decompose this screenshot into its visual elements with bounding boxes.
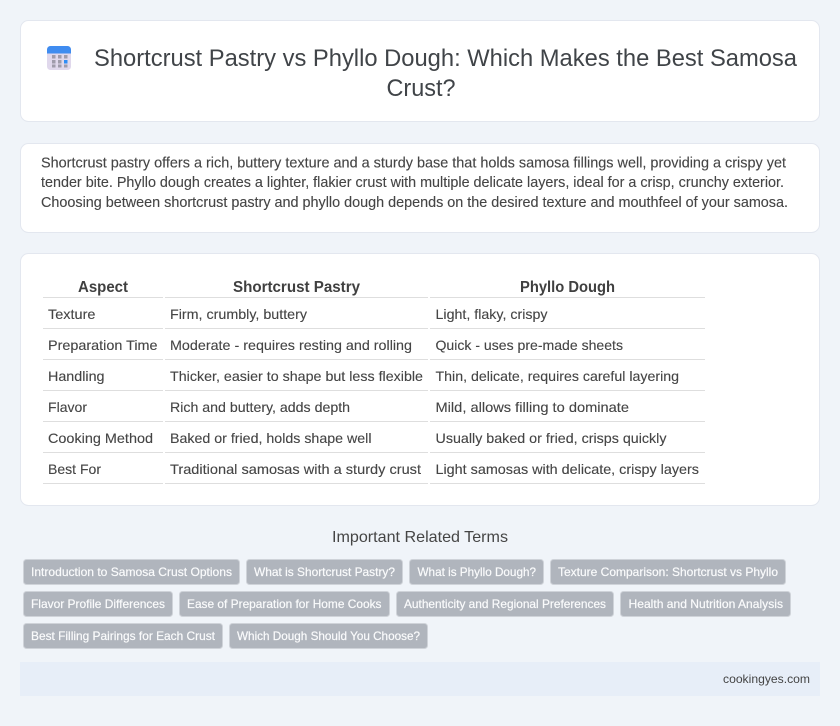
row: handling: Thicker, easier to shape but less flexible	[170, 368, 423, 384]
table header: Phyllo Dough	[520, 279, 615, 296]
footer	[20, 662, 820, 696]
chip	[550, 560, 786, 584]
chip: Which Dough Should You Choose?	[237, 629, 420, 643]
chip: Flavor Profile Differences	[31, 597, 165, 611]
footer source: cookingyes.com	[723, 672, 810, 686]
chip: Introduction to Samosa Crust Options	[31, 565, 232, 579]
row: preparation time: Moderate - requires resting and rolling	[170, 337, 412, 353]
chip	[24, 592, 172, 616]
row: best for: Traditional samosas with a sturdy crust	[170, 461, 421, 477]
table header: Shortcrust Pastry	[233, 279, 360, 296]
row: cooking method	[43, 430, 705, 453]
chip	[24, 560, 240, 584]
chip	[620, 592, 790, 616]
chip	[24, 624, 222, 648]
panel: comparison table	[20, 254, 820, 506]
row: flavor	[43, 399, 705, 422]
row: cooking method: Usually baked or fried, crisps quickly	[436, 430, 666, 446]
title: Crust?	[386, 75, 456, 102]
row: preparation time: Preparation Time	[48, 337, 158, 353]
chip: Authenticity and Regional Preferences	[404, 597, 606, 611]
row: preparation time	[43, 337, 705, 360]
panel: header	[20, 20, 820, 122]
heading: related terms: Important Related Terms	[332, 529, 508, 546]
row: flavor: Flavor	[48, 399, 87, 415]
related term chips	[24, 560, 790, 648]
chip	[396, 592, 614, 616]
chip	[410, 560, 544, 584]
row: texture: Firm, crumbly, buttery	[170, 306, 307, 322]
row: handling	[43, 368, 705, 391]
row: best for	[43, 461, 705, 484]
text block: summary: tender bite. Phyllo dough creates a lighter, flakier crust with multiple delicate layers, ideal for a crisp, crunchy exterior.	[41, 175, 784, 191]
row: best for: Light samosas with delicate, crispy layers	[436, 461, 699, 477]
row: handling: Thin, delicate, requires careful layering	[436, 368, 679, 384]
row: flavor: Rich and buttery, adds depth	[170, 399, 350, 415]
chip: What is Shortcrust Pastry?	[254, 565, 395, 579]
text block: summary: Choosing between shortcrust pastry and phyllo dough depends on the desired texture and mouthfeel of your samosa.	[41, 195, 788, 211]
chip	[246, 560, 402, 584]
row: flavor: Mild, allows filling to dominate	[436, 399, 629, 415]
chip	[230, 624, 428, 648]
row: texture: Texture	[48, 306, 96, 322]
text block: summary: Shortcrust pastry offers a rich, buttery texture and a sturdy base that holds samosa fillings well, providing a crispy yet	[41, 156, 786, 172]
table header	[43, 279, 705, 298]
chip: Texture Comparison: Shortcrust vs Phyllo	[558, 565, 778, 579]
row: preparation time: Quick - uses pre-made sheets	[436, 337, 623, 353]
chip: Health and Nutrition Analysis	[628, 597, 783, 611]
row: texture: Light, flaky, crispy	[436, 306, 548, 322]
chip: Best Filling Pairings for Each Crust	[31, 629, 216, 643]
row: best for: Best For	[48, 461, 101, 477]
title: Shortcrust Pastry vs Phyllo Dough: Which Makes the Best Samosa	[94, 45, 798, 72]
row: handling: Handling	[48, 368, 104, 384]
table header: Aspect	[78, 279, 129, 296]
chip: Ease of Preparation for Home Cooks	[187, 597, 382, 611]
icon: calendar	[47, 46, 71, 70]
row: cooking method: Cooking Method	[48, 430, 153, 446]
chip: What is Phyllo Dough?	[418, 565, 536, 579]
row: cooking method: Baked or fried, holds shape well	[170, 430, 372, 446]
panel: summary	[20, 144, 820, 232]
chip	[180, 592, 390, 616]
row: texture	[43, 306, 705, 329]
